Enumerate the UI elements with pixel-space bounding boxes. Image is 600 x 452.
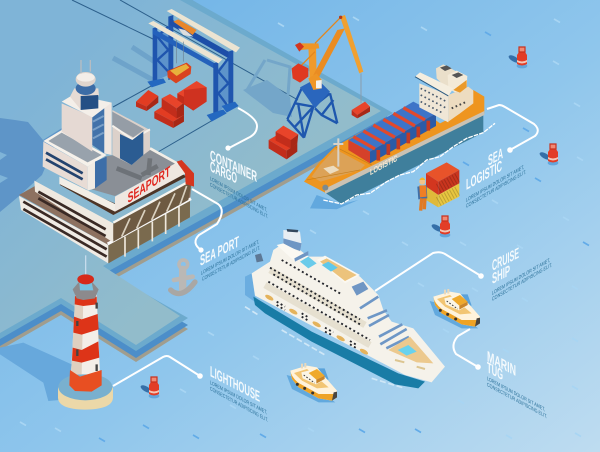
bridge — [419, 83, 448, 122]
label: cruise ship — [492, 245, 552, 303]
flag — [255, 253, 263, 262]
lantern — [73, 283, 99, 300]
balcony shading — [265, 270, 370, 345]
connector dot: marin tug — [475, 364, 481, 370]
second tier left — [34, 181, 113, 243]
second tier right — [113, 181, 192, 242]
lighthouse shadow — [0, 343, 72, 401]
funnels — [436, 64, 457, 90]
podium right face — [108, 200, 190, 263]
blue stair decks — [352, 282, 368, 296]
label: container cargo: CONTAINER — [210, 148, 257, 186]
label: cruise ship: CRUISE — [492, 245, 519, 275]
ship name: LOGISTIC — [370, 153, 398, 177]
foot — [69, 370, 102, 392]
label: cruise ship: CONSECTETUR ADIPISCING ELIT. — [492, 262, 552, 303]
label: cruise ship: LOREM IPSUM DOLOR SIT AMET, — [492, 258, 550, 297]
label: sea port — [200, 234, 260, 283]
parapet — [150, 148, 178, 164]
connector dot: container cargo — [225, 145, 231, 151]
tower block — [62, 96, 112, 155]
label: lighthouse: LIGHTHOUSE — [210, 364, 260, 406]
base — [58, 388, 113, 410]
hull and superstructure — [252, 243, 445, 382]
foam — [323, 123, 495, 204]
port crane — [287, 15, 370, 138]
deck edge left — [59, 177, 115, 212]
anchor — [171, 260, 195, 294]
cruise ship — [245, 229, 445, 388]
label: lighthouse — [210, 364, 268, 424]
label: marin tug: LOREM IPSUM DOLOR SIT AMET, — [487, 376, 545, 413]
label: sea logistic: CONSECTETUR ADIPISCING ELIT. — [466, 169, 526, 210]
bow wake — [245, 307, 405, 388]
hull waterline — [325, 115, 483, 204]
label: sea logistic: LOGISTIC — [466, 157, 502, 194]
mast — [333, 138, 343, 167]
ship shadow — [310, 195, 358, 209]
container deck — [348, 102, 436, 163]
terrace — [88, 148, 177, 196]
tower — [71, 294, 100, 374]
crane column — [308, 46, 317, 83]
connector dot: lighthouse — [197, 373, 203, 379]
worker — [417, 177, 427, 211]
label: marin tug: CONSECTETUR ADIPISCING ELIT. — [487, 382, 547, 420]
label: container cargo: LOREM IPSUM DOLOR SIT AMET, — [210, 176, 267, 214]
label: container cargo: CARGO — [210, 159, 237, 187]
cargo ship — [304, 64, 495, 209]
title: seaport sign: SEAPORT — [128, 163, 171, 207]
cable and container — [359, 73, 362, 103]
connector dot: cruise ship — [478, 273, 484, 279]
label: sea port: LOREM IPSUM DOLOR SIT AMET, — [201, 239, 259, 277]
label: sea logistic: SEA — [488, 145, 503, 170]
red drum and cab — [295, 42, 304, 52]
sign wall — [115, 163, 186, 212]
containers: red stacks — [136, 81, 298, 159]
containers and worker — [417, 162, 459, 211]
lifeboats — [264, 294, 369, 356]
connector: container cargo — [229, 108, 257, 148]
cabin windows — [268, 260, 370, 348]
label: sea port: SEA PORT — [200, 234, 239, 270]
upper decks — [300, 257, 317, 268]
podium ledge — [19, 182, 192, 245]
right block — [112, 110, 150, 165]
panel: port land — [0, 0, 393, 362]
label: sea logistic — [466, 145, 526, 210]
rear deckhouse — [448, 87, 473, 122]
buoys — [140, 47, 558, 398]
hull orange — [304, 90, 484, 193]
brown band under deck — [60, 172, 187, 215]
label: lighthouse: LOREM IPSUM DOLOR SIT AMET, — [210, 380, 267, 416]
lighthouse — [0, 255, 113, 410]
label: container cargo: CONSECTETUR ADIPISCING ELIT. — [210, 182, 268, 220]
seaport building — [19, 60, 194, 263]
crane legs — [287, 88, 337, 138]
funnel — [283, 230, 302, 251]
red container — [177, 160, 194, 187]
label: cruise ship: SHIP — [492, 263, 510, 288]
label: sea logistic: LOREM IPSUM DOLOR SIT AMET, — [466, 165, 524, 204]
container crane — [147, 9, 240, 122]
connector: marin tug — [453, 329, 478, 367]
lower office block — [43, 130, 107, 191]
connector dot: sea port — [198, 247, 204, 253]
label: sea port: CONSECTETUR ADIPISCING ELIT. — [202, 245, 260, 283]
label: marin tug: TUG — [487, 360, 503, 384]
cruise ship shadow — [245, 273, 273, 315]
connector: lighthouse — [113, 356, 200, 386]
connector: sea port — [192, 189, 222, 250]
bow deck — [388, 337, 433, 363]
connector: cruise ship — [375, 252, 481, 291]
roof anchor — [142, 158, 158, 175]
crane boom — [313, 28, 345, 78]
label: container cargo — [210, 148, 268, 220]
hull waterline — [253, 297, 425, 388]
connector: sea logistic — [487, 105, 538, 150]
marine tugs — [287, 289, 480, 402]
control tower — [70, 60, 99, 110]
label: marin tug — [487, 349, 547, 420]
light pole — [84, 255, 88, 275]
connector dot: sea logistic — [507, 147, 513, 153]
label: marin tug: MARIN — [487, 349, 516, 380]
podium left face — [19, 196, 108, 263]
label: lighthouse: CONSECTETUR ADIPISCING ELIT. — [210, 386, 268, 424]
